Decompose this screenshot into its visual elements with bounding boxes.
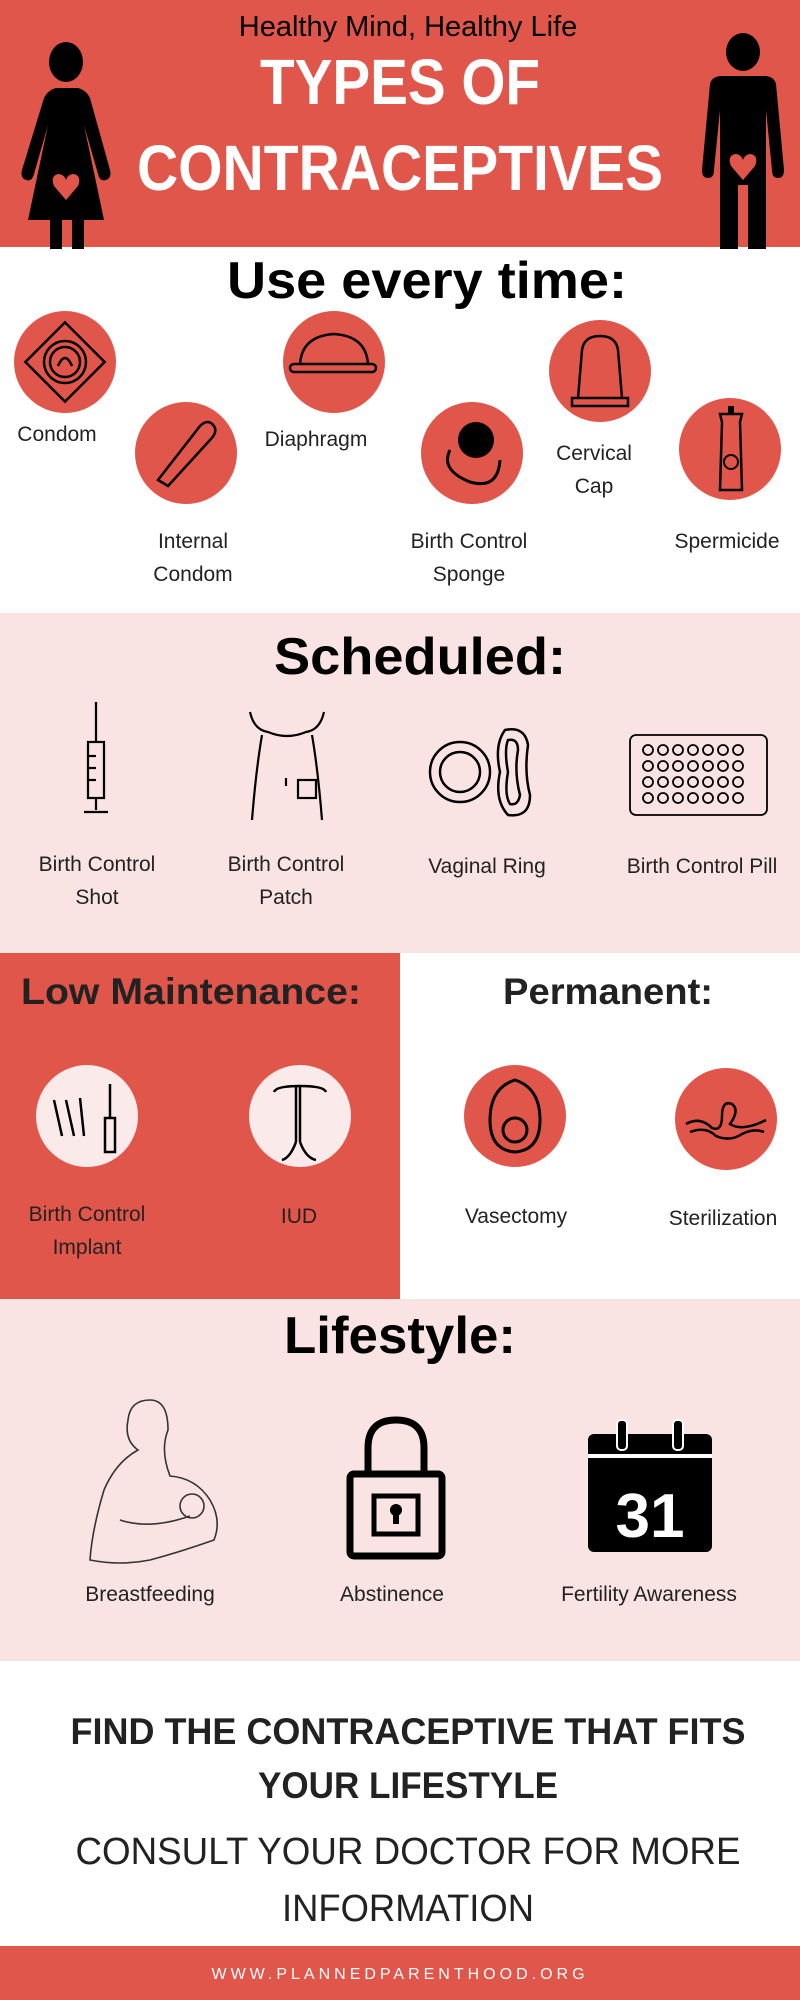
icon: calendar: 31 <box>616 1482 684 1551</box>
icon: woman figure <box>22 42 110 249</box>
item: implant <box>29 1065 145 1259</box>
icon: vaginal ring <box>430 729 530 815</box>
call to action <box>70 1711 746 1930</box>
item: diaphragm: Diaphragm <box>265 428 367 451</box>
labels: scheduled: Patch <box>259 886 313 909</box>
labels: scheduled: Birth Control Pill <box>627 855 777 878</box>
item: cervical cap <box>549 320 651 498</box>
heading: permanent: Permanent: <box>503 971 713 1012</box>
item: cervical cap: Cervical <box>556 442 632 465</box>
labels: scheduled: Birth Control <box>39 853 155 876</box>
item: IUD <box>249 1065 351 1228</box>
icon: shot <box>84 702 108 812</box>
icon: patch <box>250 712 324 820</box>
title: CONTRACEPTIVES <box>137 132 663 204</box>
icon: calendar <box>588 1420 712 1552</box>
item: internal condom <box>135 402 237 586</box>
call to action: INFORMATION <box>282 1888 534 1930</box>
footer: WWW.PLANNEDPARENTHOOD.ORG <box>211 1966 589 1983</box>
title: TYPES OF <box>260 46 540 118</box>
heading: use every time: Use every time: <box>227 252 627 310</box>
item: spermicide <box>674 398 781 553</box>
panel: permanent <box>464 971 777 1230</box>
labels: scheduled: Vaginal Ring <box>428 855 546 878</box>
header band <box>0 0 800 247</box>
item: condom <box>14 311 116 446</box>
panel: lifestyle <box>0 1299 800 1661</box>
call to action: CONSULT YOUR DOCTOR FOR MORE <box>76 1831 740 1873</box>
title <box>137 46 663 204</box>
item: sponge: Sponge <box>433 563 505 586</box>
item: cervical cap: Cap <box>575 475 613 498</box>
footer <box>0 1946 800 2000</box>
labels: lifestyle: Fertility Awareness <box>561 1583 737 1606</box>
item: sponge: Birth Control <box>411 530 527 553</box>
heading: scheduled: Scheduled: <box>274 628 566 686</box>
item: sterilization <box>669 1068 777 1230</box>
labels: lifestyle: Abstinence <box>340 1583 444 1606</box>
call to action: YOUR LIFESTYLE <box>258 1765 558 1806</box>
heading: low maintenance: Low Maintenance: <box>21 971 361 1012</box>
item: implant: Implant <box>53 1236 122 1259</box>
call to action: FIND THE CONTRACEPTIVE THAT FITS <box>70 1711 746 1752</box>
item: sponge <box>411 402 527 586</box>
item: condom: Condom <box>17 423 97 446</box>
item: vasectomy <box>464 1065 568 1228</box>
labels: lifestyle: Breastfeeding <box>85 1583 215 1606</box>
labels: scheduled <box>39 853 777 909</box>
item: implant: Birth Control <box>29 1203 145 1226</box>
icon: lock <box>350 1420 442 1556</box>
subtitle: Healthy Mind, Healthy Life <box>239 11 577 43</box>
icon: man figure <box>702 33 784 249</box>
item: spermicide: Spermicide <box>674 530 780 553</box>
item: IUD: IUD <box>281 1205 317 1228</box>
item: diaphragm <box>265 311 385 451</box>
labels: scheduled: Shot <box>75 886 119 909</box>
heading: lifestyle: Lifestyle: <box>284 1307 516 1365</box>
item: sterilization: Sterilization <box>669 1207 777 1230</box>
icon: pill pack <box>630 735 767 815</box>
labels: lifestyle <box>85 1583 737 1606</box>
item: internal condom: Condom <box>153 563 233 586</box>
panel: scheduled <box>0 613 800 953</box>
item: internal condom: Internal <box>158 530 228 553</box>
item: vasectomy: Vasectomy <box>465 1205 568 1228</box>
icon: breastfeeding <box>90 1400 217 1563</box>
panel: low maintenance <box>0 953 400 1299</box>
labels: scheduled: Birth Control <box>228 853 344 876</box>
icon: lock keyhole <box>390 1504 402 1524</box>
